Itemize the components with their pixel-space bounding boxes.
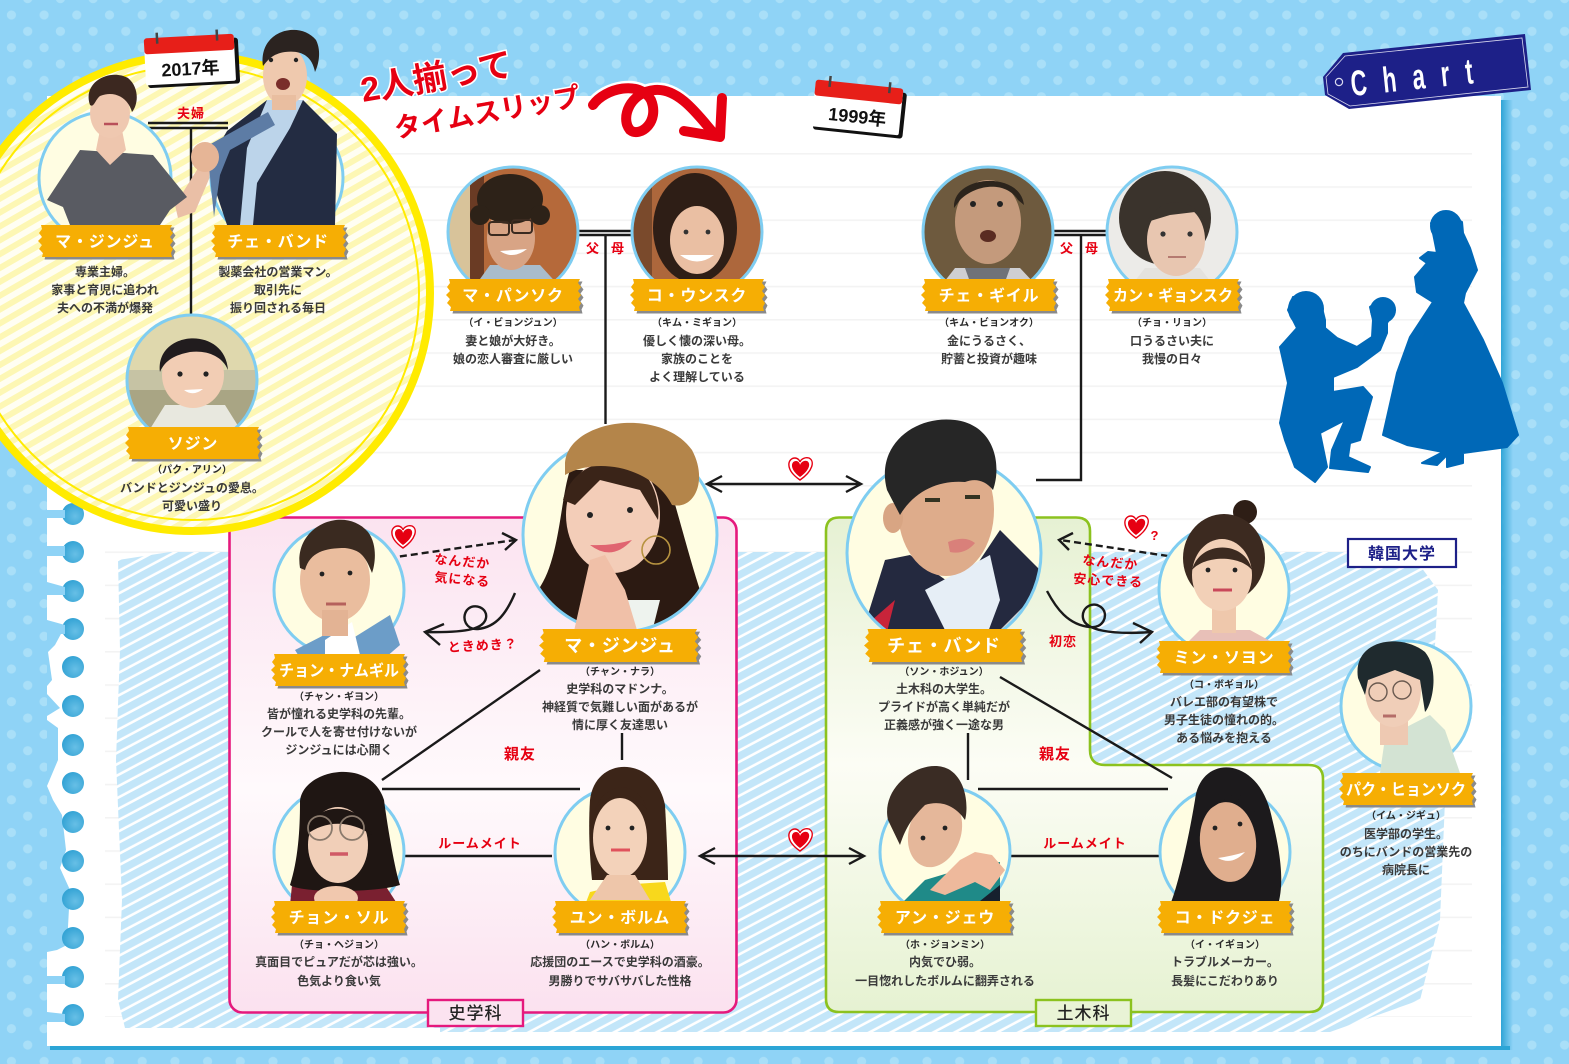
relationship lines: engineering friends (968, 677, 1172, 856)
description: （チャン・ナラ） (580, 666, 660, 678)
description (218, 264, 338, 315)
label: history department (428, 1000, 523, 1026)
arrow: Bando curly to Soyeon (1047, 591, 1152, 643)
name tape: パク・ヒョンソク (1346, 781, 1466, 799)
description (453, 316, 573, 366)
panel: history department (230, 518, 736, 1012)
name tape (211, 225, 348, 260)
labels: relationship text: 母 (1085, 241, 1099, 256)
portrait (38, 74, 210, 225)
relationship arrow: Jinju and Bando (707, 476, 861, 492)
person: Ko Dokjae (1157, 767, 1294, 988)
labels: relationship text: 安心できる (1073, 571, 1143, 590)
description: 家族のことを (661, 351, 733, 366)
person: Jung Sol (255, 772, 423, 988)
labels: relationship text: ルームメイト (1043, 836, 1127, 851)
relationship lines: history friends (382, 670, 622, 856)
icon: heart question Soyeon (1125, 516, 1159, 543)
description: （チョ・リョン） (1132, 317, 1212, 329)
description: 土木科の大学生。 (896, 681, 992, 696)
description: バレエ部の有望株で (1170, 694, 1278, 709)
description: （キム・ビョンオク） (939, 316, 1039, 329)
labels: relationship text (434, 241, 1143, 851)
description: プライドが高く単純だが (878, 699, 1010, 714)
description: よく理解している (649, 369, 745, 384)
name tape (630, 279, 768, 314)
name tape (1157, 901, 1294, 936)
name tape (539, 629, 701, 665)
person: Jung Namgil (261, 520, 417, 757)
description (255, 939, 423, 988)
description: 男子生徒の憧れの的。 (1164, 712, 1284, 727)
family lines: Ma parents (578, 231, 632, 424)
calendar: 1999 (811, 74, 908, 139)
name tape (921, 279, 1058, 314)
icon: heart Bolmu Jaewoo (789, 829, 812, 851)
description: （イ・イギョン） (1185, 939, 1265, 951)
heading: time slip: 2人揃って (358, 46, 515, 110)
description (1130, 317, 1214, 366)
family lines: Choi parents (1036, 231, 1108, 480)
portrait (1108, 168, 1236, 279)
description: 専業主婦。 (75, 264, 135, 279)
description: 内気でひ弱。 (909, 954, 981, 969)
description: （コ・ボギョル） (1184, 679, 1264, 691)
description: 男勝りでサバサバした性格 (548, 973, 692, 988)
description: 取引先に (254, 282, 302, 297)
description: 一目惚れしたボルムに翻弄される (855, 973, 1035, 988)
description (51, 264, 159, 315)
name tape (877, 901, 1014, 936)
person: An Jaewoo (855, 766, 1035, 988)
labels: relationship text: なんだか (434, 552, 491, 571)
description (878, 666, 1010, 732)
tag: Chart (1323, 34, 1531, 109)
description: （チャン・ギヨン） (294, 691, 384, 703)
portrait (450, 168, 576, 279)
description: 真面目でピュアだが芯は強い。 (255, 954, 423, 969)
description: 口うるさい夫に (1130, 333, 1214, 348)
icon: heart question Soyeon: ? (1151, 528, 1159, 543)
description: 正義感が強く一途な男 (884, 717, 1004, 732)
description (542, 666, 698, 732)
portrait (1159, 500, 1289, 658)
labels: relationship text: 親友 (504, 745, 536, 763)
labels: relationship text: 初恋 (1049, 634, 1077, 649)
icon: heart Namgil (392, 526, 415, 548)
description (1164, 679, 1284, 745)
relationship arrow: Bolmu and Jaewoo (700, 848, 864, 864)
description: 神経質で気難しい面があるが (542, 699, 698, 714)
portrait (128, 316, 256, 427)
description: 娘の恋人審査に厳しい (453, 351, 573, 366)
calendar: 1999: 1999年 (827, 103, 887, 130)
name tape: マ・ジンジュ (564, 636, 676, 656)
name tape: ユン・ボルム (570, 909, 670, 927)
panel: civil engineering department (826, 518, 1323, 1012)
description: （ハン・ボルム） (580, 939, 660, 951)
description: （イム・ジギュ） (1366, 810, 1446, 822)
name tape: アン・ジェウ (895, 909, 995, 927)
icon: proposal silhouette (1280, 211, 1518, 482)
person: Choi Bando 1999 (847, 419, 1041, 732)
description (120, 464, 264, 513)
description: 振り回される毎日 (230, 300, 326, 315)
portrait (1160, 767, 1290, 917)
description: （キム・ミギョン） (652, 317, 742, 329)
person: Min Soyeon (1156, 500, 1294, 745)
description: クールで人を寄せ付けないが (261, 724, 417, 739)
name tape: チョン・ナムギル (279, 662, 399, 680)
description: のちにバンドの営業先の (1340, 844, 1472, 859)
name tape: マ・パンソク (462, 287, 564, 305)
person: Kang Gyeongsuk (1105, 166, 1242, 366)
description: 医学部の学生。 (1364, 826, 1448, 841)
calendar: 2017 (143, 28, 240, 88)
heading: time slip: タイムスリップ (392, 82, 583, 144)
name tape: チョン・ソル (289, 909, 389, 927)
person: Yojin (120, 314, 264, 513)
person: Ma Bangsok (446, 166, 584, 366)
heading: time slip (358, 46, 583, 144)
description: 皆が憧れる史学科の先輩。 (267, 706, 411, 721)
person: Park Hyunsuk (1339, 641, 1476, 877)
portrait (274, 520, 404, 658)
person: Ma Jinju 2017 (38, 75, 212, 315)
description: 史学科のマドンナ。 (566, 681, 674, 696)
person: Yoon Bolmu (530, 767, 710, 988)
description: 我慢の日々 (1142, 351, 1202, 366)
labels: relationship text: ルームメイト (438, 836, 522, 851)
portrait (523, 423, 717, 640)
person: Choi Gil (921, 166, 1058, 366)
label: Korea University (1348, 539, 1456, 567)
labels: relationship text: 父 (586, 241, 600, 256)
description: 妻と娘が大好き。 (465, 333, 561, 348)
description (1340, 810, 1472, 877)
name tape (1156, 641, 1294, 676)
description: 製薬会社の営業マン。 (218, 264, 338, 279)
description: （ソン・ホジュン） (899, 666, 989, 678)
name tape (125, 427, 262, 462)
description (261, 691, 417, 757)
labels: relationship text: なんだか (1082, 553, 1139, 572)
portrait (924, 168, 1052, 279)
description: 優しく懐の深い母。 (643, 333, 751, 348)
arrow: Namgil dashed to Jinju (389, 533, 516, 558)
name tape: チェ・ギイル (939, 287, 1039, 305)
description (939, 316, 1039, 366)
portrait (274, 772, 404, 917)
description (855, 939, 1035, 988)
description: （イ・ビョンジュン） (463, 316, 563, 329)
description: 夫への不満が爆発 (57, 300, 153, 315)
label: history department: 史学科 (448, 1004, 502, 1023)
name tape: ソジン (168, 436, 218, 453)
name tape: ミン・ソヨン (1174, 650, 1274, 667)
description: 色気より食い気 (297, 973, 381, 988)
portrait (555, 767, 685, 917)
name tape (271, 654, 408, 688)
panel: 2017 circle (0, 55, 430, 531)
description: 応援団のエースで史学科の酒豪。 (530, 954, 710, 969)
icon: heart Jinju Bando (789, 458, 812, 480)
labels: relationship text: 母 (611, 241, 625, 256)
label: civil engineering department: 土木科 (1056, 1004, 1110, 1023)
labels: relationship text: 父 (1060, 241, 1074, 256)
labels: relationship text: 親友 (1039, 745, 1071, 763)
arrow: Soyeon dashed to Bando (1059, 533, 1168, 556)
description: （チョ・ヘジョン） (294, 939, 384, 951)
calendar: 2017: 2017年 (161, 56, 220, 80)
arrow: Jinju curly to Namgil (425, 593, 515, 645)
description (643, 317, 751, 384)
labels: relationship text: 気になる (434, 570, 491, 589)
description: 情に厚く友達思い (572, 717, 668, 732)
description (530, 939, 710, 988)
name tape: マ・ジンジュ (55, 234, 155, 251)
name tape: コ・ドクジェ (1175, 909, 1275, 927)
name tape (38, 225, 176, 260)
name tape: カン・ギョンスク (1113, 287, 1233, 305)
name tape (271, 901, 408, 936)
person: Choi Bando 2017 (191, 30, 348, 315)
description: ある悩みを抱える (1176, 730, 1272, 745)
description: 貯蓄と投資が趣味 (941, 351, 1037, 366)
description: 家事と育児に追われ (51, 282, 159, 297)
name tape (1339, 773, 1476, 808)
description: （ホ・ジョンミン） (900, 939, 990, 951)
description: 病院長に (1382, 863, 1430, 877)
label: Korea University: 韓国大学 (1368, 544, 1436, 563)
name tape (1105, 279, 1242, 314)
description: 長髪にこだわりあり (1171, 973, 1279, 988)
name tape (446, 279, 584, 314)
tag: Chart: Chart (1349, 50, 1491, 104)
name tape (864, 629, 1026, 665)
description: トラブルメーカー。 (1171, 954, 1279, 969)
description: ジンジュには心開く (285, 742, 393, 757)
label: civil engineering department (1036, 1000, 1131, 1026)
label: married couple: 夫婦 (177, 106, 205, 121)
arrow: curly red arrow (593, 88, 722, 137)
description: バンドとジンジュの愛息。 (120, 480, 264, 495)
description: （パク・アリン） (152, 464, 232, 476)
portrait (880, 766, 1010, 917)
name tape: コ・ウンスク (647, 287, 747, 305)
description (1171, 939, 1279, 988)
portrait (191, 30, 343, 244)
labels: relationship text: ときめき？ (447, 636, 518, 655)
family lines: 2017 couple (148, 123, 228, 316)
description: 可愛い盛り (162, 498, 222, 513)
name tape (552, 901, 690, 936)
person: Ko Eunsuk (630, 166, 768, 384)
name tape: チェ・バンド (887, 636, 1001, 656)
portrait (847, 419, 1041, 650)
name tape: チェ・バンド (227, 233, 329, 251)
description: 金にうるさく、 (947, 333, 1031, 348)
portrait (1341, 641, 1471, 773)
blue scribble background (116, 552, 1445, 1032)
person: Ma Jinju 1999 (523, 423, 717, 732)
portrait (634, 168, 760, 279)
